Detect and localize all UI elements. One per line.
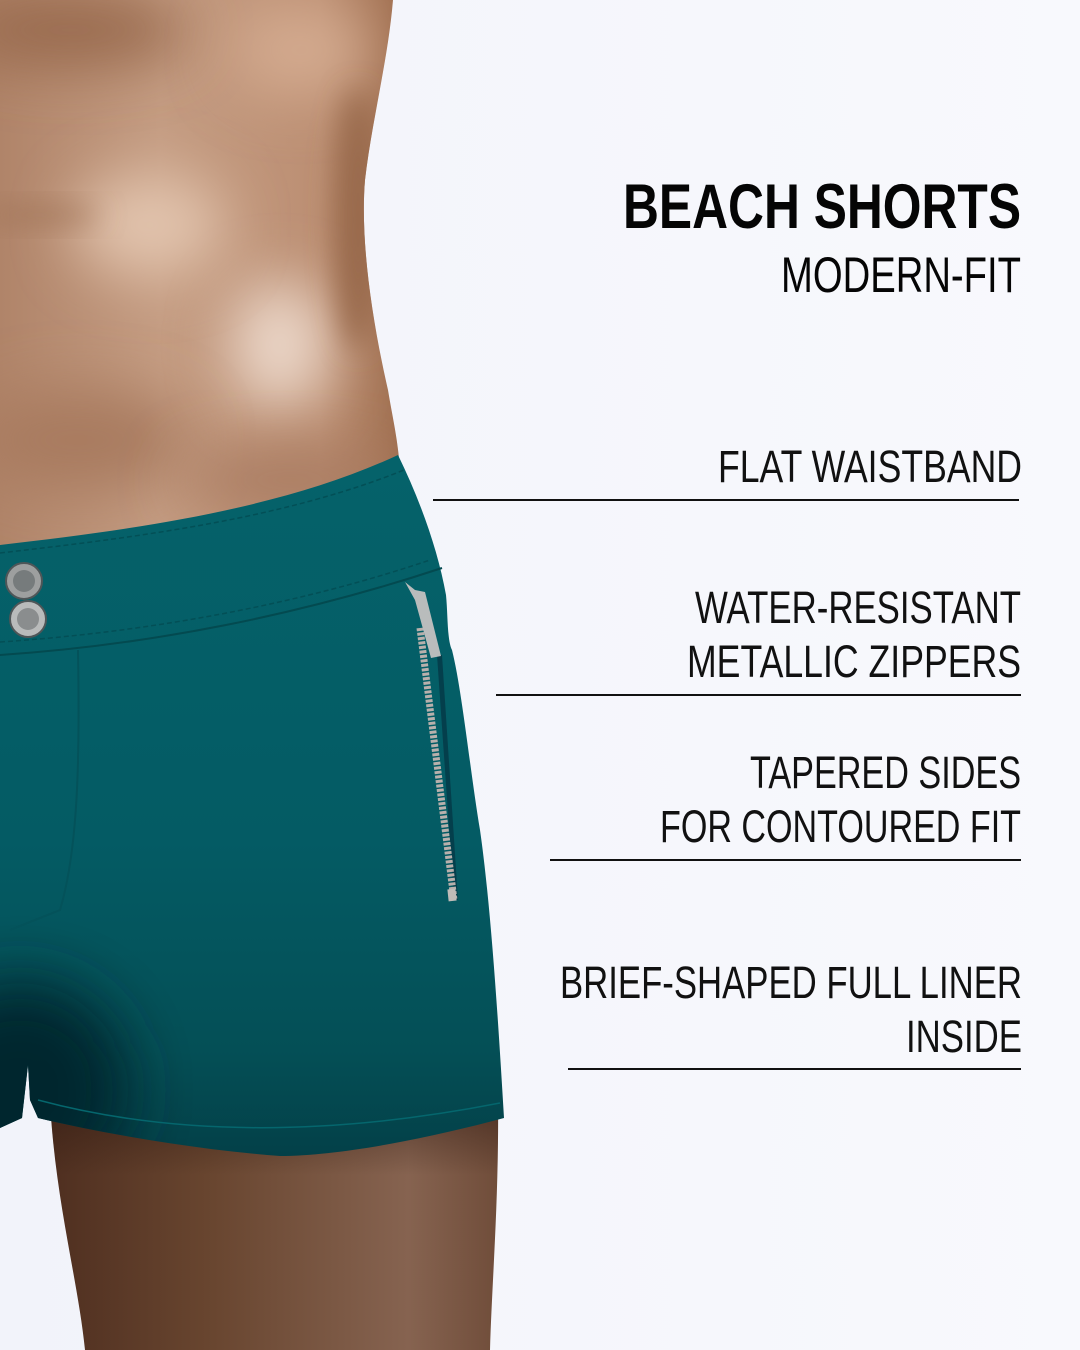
feature: full liner: INSIDE [906, 1011, 1022, 1062]
leg [50, 1100, 498, 1350]
photo: model torso [0, 0, 498, 1350]
detail: waistband [0, 470, 500, 1128]
icon: metal buttons [6, 563, 46, 637]
feature: tapered sides [550, 747, 1021, 861]
icon: metallic zipper [405, 582, 458, 901]
photo: teal shorts [0, 455, 504, 1200]
feature: full liner [560, 957, 1022, 1070]
feature: zippers [496, 582, 1021, 696]
